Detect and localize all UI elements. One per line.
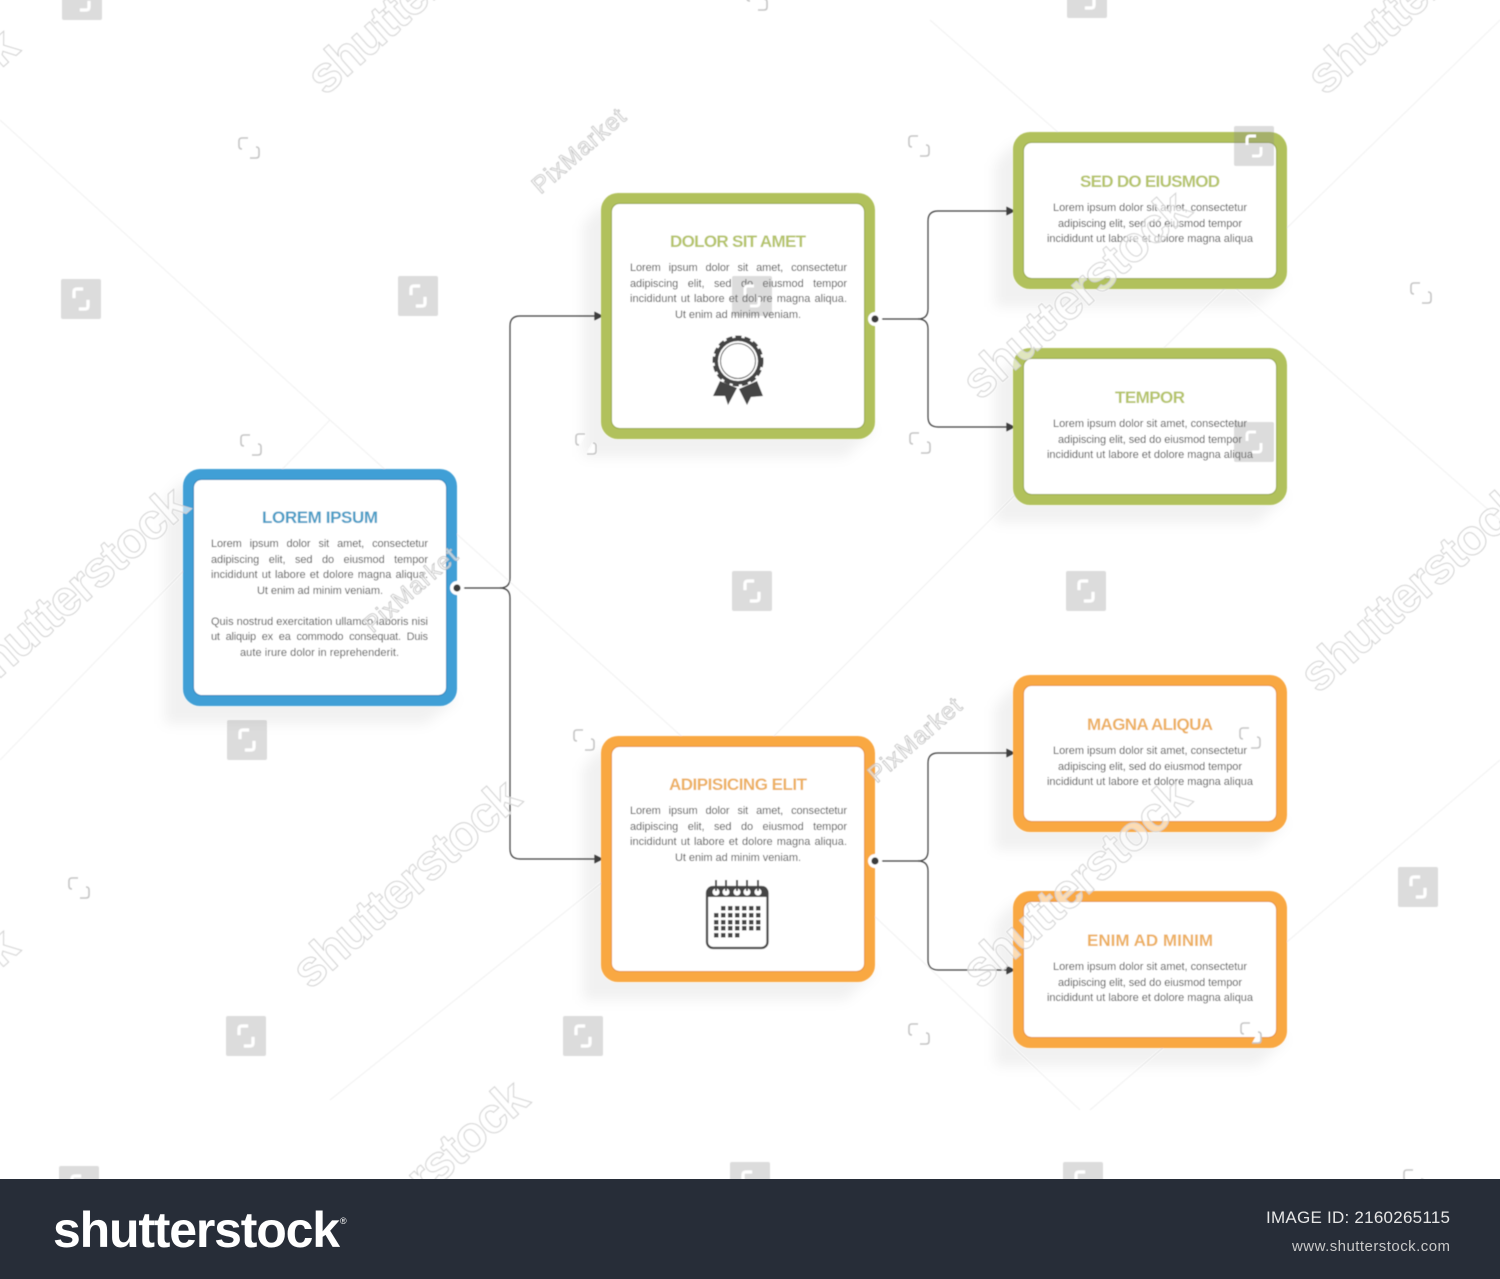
watermark: pixmarket: PixMarket [863,692,968,788]
text block: lorem ipsum [211,538,428,659]
heading: sed do eiusmod: SED DO EIUSMOD [1080,172,1220,191]
text block: lorem ipsum: adipiscing elit, sed do eiusmod tempor [211,554,428,566]
text block: lorem ipsum: Quis nostrud exercitation ullamco laboris nisi [211,616,428,628]
text block: tempor: adipiscing elit, sed do eiusmod tempor [1058,434,1242,446]
text block: lorem ipsum: Ut enim ad minim veniam. [257,585,383,597]
text block: sed do eiusmod: Lorem ipsum dolor sit amet, consectetur [1053,202,1247,214]
icon: award ribbon [713,338,763,405]
text block: tempor: incididunt ut labore et dolore magna aliqua [1047,449,1254,461]
text block: dolor sit amet: incididunt ut labore et dolore magna aliqua. [630,293,847,305]
panel: lorem ipsum [165,469,464,724]
heading: magna aliqua: MAGNA ALIQUA [1087,715,1213,734]
footer bar [0,1179,1500,1279]
connector dot [868,312,882,326]
watermark text: shutterstock [950,768,1201,999]
text block: magna aliqua [1047,745,1254,788]
heading: tempor: TEMPOR [1115,388,1185,407]
text block: adipisicing elit [630,805,847,864]
text block: lorem ipsum: incididunt ut labore et dolore magna aliqua. [211,569,428,581]
text block: tempor: Lorem ipsum dolor sit amet, consectetur [1053,418,1247,430]
connector: adipisicing elit to children [875,750,1014,974]
panel: magna aliqua [995,675,1287,850]
text block: dolor sit amet: Lorem ipsum dolor sit amet, consectetur [630,262,847,274]
text block: adipisicing elit: incididunt ut labore et dolore magna aliqua. [630,836,847,848]
text block: enim ad minim: incididunt ut labore et dolore magna aliqua [1047,992,1254,1004]
text block: dolor sit amet: adipiscing elit, sed do eiusmod tempor [630,278,847,290]
text block: enim ad minim: adipiscing elit, sed do eiusmod tempor [1058,977,1242,989]
image id: IMAGE ID: 2160265115 [1266,1208,1450,1227]
text block: magna aliqua: incididunt ut labore et dolore magna aliqua [1047,776,1254,788]
watermark text: shutterstock [950,179,1201,410]
text block: enim ad minim: Lorem ipsum dolor sit amet, consectetur [1053,961,1247,973]
text block: lorem ipsum: Lorem ipsum dolor sit amet, consectetur [211,538,428,550]
text block: adipisicing elit: Lorem ipsum dolor sit amet, consectetur [630,805,847,817]
text block: adipisicing elit: Ut enim ad minim veniam. [675,852,801,864]
connector: dolor sit amet to children [875,208,1014,430]
text block: sed do eiusmod: adipiscing elit, sed do eiusmod tempor [1058,218,1242,230]
heading: adipisicing elit: ADIPISICING ELIT [669,775,808,794]
text block: magna aliqua: adipiscing elit, sed do eiusmod tempor [1058,761,1242,773]
watermark: pixmarket: PixMarket [527,103,632,199]
text block: lorem ipsum: aute irure dolor in reprehenderit. [240,647,399,659]
watermark: pixmarket [359,103,968,788]
heading: lorem ipsum: LOREM IPSUM [262,508,378,527]
panel: enim ad minim [995,891,1287,1066]
connector: lorem ipsum to second level [457,312,602,862]
text block: dolor sit amet: Ut enim ad minim veniam. [675,309,801,321]
panel: adipisicing elit [583,736,882,1000]
website: www.shutterstock.com [1291,1238,1450,1255]
registered mark: ® [340,1216,347,1226]
text block: adipisicing elit: adipiscing elit, sed do eiusmod tempor [630,821,847,833]
text block: sed do eiusmod: incididunt ut labore et dolore magna aliqua [1047,233,1254,245]
panel: sed do eiusmod [995,132,1287,307]
text block: dolor sit amet [630,262,847,321]
heading: dolor sit amet: DOLOR SIT AMET [670,232,807,251]
text block: enim ad minim [1047,961,1254,1004]
connector dot [868,854,882,868]
footer logo: shutterstock [53,1202,340,1258]
icon: calendar [707,880,768,948]
watermark: pixmarket: PixMarket [359,542,464,638]
text block: magna aliqua: Lorem ipsum dolor sit amet, consectetur [1053,745,1247,757]
text block: sed do eiusmod [1047,202,1254,245]
text block: tempor [1047,418,1254,461]
panel: dolor sit amet [583,193,882,457]
text block: lorem ipsum: ut aliquip ex ea commodo consequat. Duis [211,631,428,643]
panel: tempor [995,348,1287,523]
watermark text: shutterstock [280,768,531,999]
connector dot [450,581,464,595]
heading: enim ad minim: ENIM AD MINIM [1087,931,1213,950]
